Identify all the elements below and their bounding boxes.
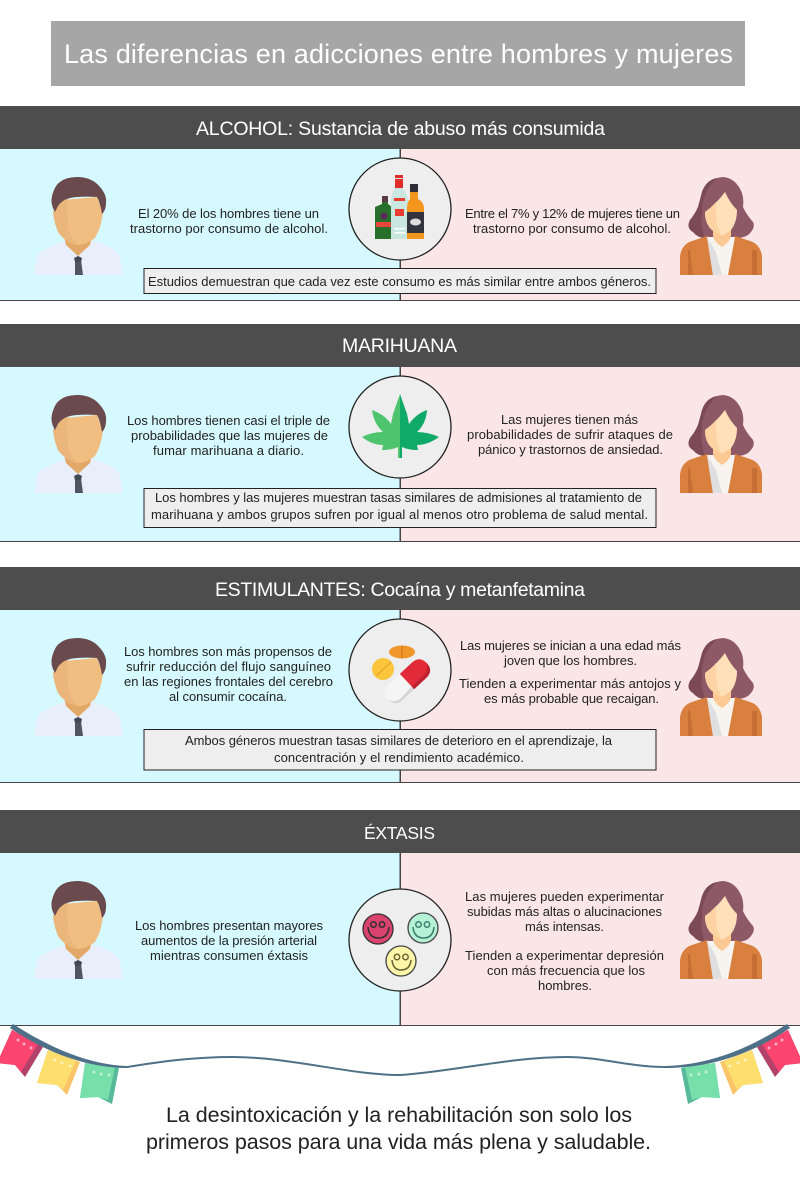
garland: [0, 1024, 800, 1104]
text: women marihuana: probabilidades de sufrir ataques de: [467, 427, 673, 442]
text: men extasis: [135, 918, 324, 963]
callout: marihuana: marihuana y ambos grupos sufren por igual al menos otro problema de salud mental.: [151, 507, 648, 522]
icon: man: [34, 395, 123, 493]
text: women extasis: más intensas.: [525, 919, 604, 934]
garland string: [10, 1024, 790, 1075]
text: men estimulantes: Los hombres son más propensos de: [124, 644, 332, 659]
icon: woman: [680, 395, 762, 493]
panel: marihuana: [0, 324, 800, 542]
panel: alcohol: [0, 106, 800, 301]
text: men marihuana: fumar marihuana a diario.: [153, 443, 304, 458]
icon: woman: [680, 881, 762, 979]
text: men alcohol: trastorno por consumo de alcohol.: [130, 221, 328, 236]
text: women estimulantes: es más probable que recaigan.: [484, 691, 659, 706]
text: men estimulantes: [124, 644, 333, 704]
heading: alcohol: [0, 106, 800, 149]
text: women extasis: [465, 889, 665, 993]
closing message: primeros pasos para una vida más plena y saludable.: [146, 1130, 651, 1154]
text: men extasis: mientras consumen éxtasis: [150, 948, 308, 963]
text: men marihuana: probabilidades que las mujeres de: [131, 428, 328, 443]
text: women marihuana: [467, 412, 673, 457]
callout: estimulantes: Ambos géneros muestran tasas similares de deterioro en el aprendizaje, la: [185, 733, 613, 748]
text: men marihuana: Los hombres tienen casi el triple de: [127, 413, 330, 428]
text: women estimulantes: Tienden a experimentar más antojos y: [459, 676, 682, 691]
text: women extasis: con más frecuencia que los: [487, 963, 646, 978]
heading: marihuana: MARIHUANA: [342, 335, 457, 357]
text: women marihuana: Las mujeres tienen más: [501, 412, 638, 427]
text: men extasis: Los hombres presentan mayores: [135, 918, 324, 933]
callout: marihuana: Los hombres y las mujeres muestran tasas similares de admisiones al tratamiento de: [155, 490, 642, 505]
heading: extasis: [0, 810, 800, 853]
text: women extasis: hombres.: [538, 978, 592, 993]
text: men extasis: aumentos de la presión arterial: [141, 933, 317, 948]
heading: marihuana: [0, 324, 800, 367]
icon: cannabis leaf: [349, 376, 451, 478]
callout: alcohol: [144, 268, 656, 294]
title: Las diferencias en adicciones entre hombres y mujeres: [64, 39, 733, 69]
text: women alcohol: [465, 206, 680, 236]
text: women extasis: Las mujeres pueden experimentar: [465, 889, 665, 904]
text: women estimulantes: [459, 638, 682, 706]
title: [51, 21, 745, 86]
text: men estimulantes: al consumir cocaína.: [169, 689, 287, 704]
callout: alcohol: Estudios demuestran que cada vez este consumo es más similar entre ambos géneros.: [148, 274, 651, 289]
icon: man: [34, 638, 123, 736]
flags: left: [0, 1030, 119, 1104]
icon: bottles: [349, 158, 451, 260]
closing message: La desintoxicación y la rehabilitación son solo los: [166, 1103, 632, 1127]
heading: alcohol: ALCOHOL: Sustancia de abuso más consumida: [196, 118, 605, 140]
heading: estimulantes: [0, 567, 800, 610]
closing message: [146, 1103, 651, 1154]
text: men alcohol: [130, 206, 328, 236]
panel: estimulantes: [0, 567, 800, 783]
text: women alcohol: trastorno por consumo de alcohol.: [473, 221, 671, 236]
heading: extasis: ÉXTASIS: [364, 823, 435, 843]
icon: woman: [680, 177, 762, 275]
text: women estimulantes: joven que los hombres.: [503, 653, 637, 668]
text: men alcohol: El 20% de los hombres tiene un: [138, 206, 319, 221]
icon: pills: [349, 619, 451, 721]
flags: right: [681, 1030, 800, 1104]
text: men marihuana: [127, 413, 330, 458]
panel: extasis: [0, 810, 800, 1026]
text: women marihuana: pánico y trastornos de ansiedad.: [478, 442, 663, 457]
text: women extasis: Tienden a experimentar depresión: [465, 948, 664, 963]
icon: smiley pills: [349, 889, 451, 991]
icon: man: [34, 177, 123, 275]
text: women alcohol: Entre el 7% y 12% de mujeres tiene un: [465, 206, 680, 221]
text: women estimulantes: Las mujeres se inician a una edad más: [460, 638, 682, 653]
text: women extasis: subidas más altas o alucinaciones: [467, 904, 662, 919]
text: men estimulantes: en las regiones frontales del cerebro: [124, 674, 333, 689]
heading: estimulantes: ESTIMULANTES: Cocaína y metanfetamina: [215, 579, 585, 601]
icon: man: [34, 881, 123, 979]
text: men estimulantes: sufrir reducción del flujo sanguíneo: [126, 659, 331, 674]
icon: woman: [680, 638, 762, 736]
callout: marihuana: [144, 488, 656, 528]
callout: estimulantes: concentración y el rendimiento académico.: [274, 750, 524, 765]
callout: estimulantes: [144, 730, 656, 770]
